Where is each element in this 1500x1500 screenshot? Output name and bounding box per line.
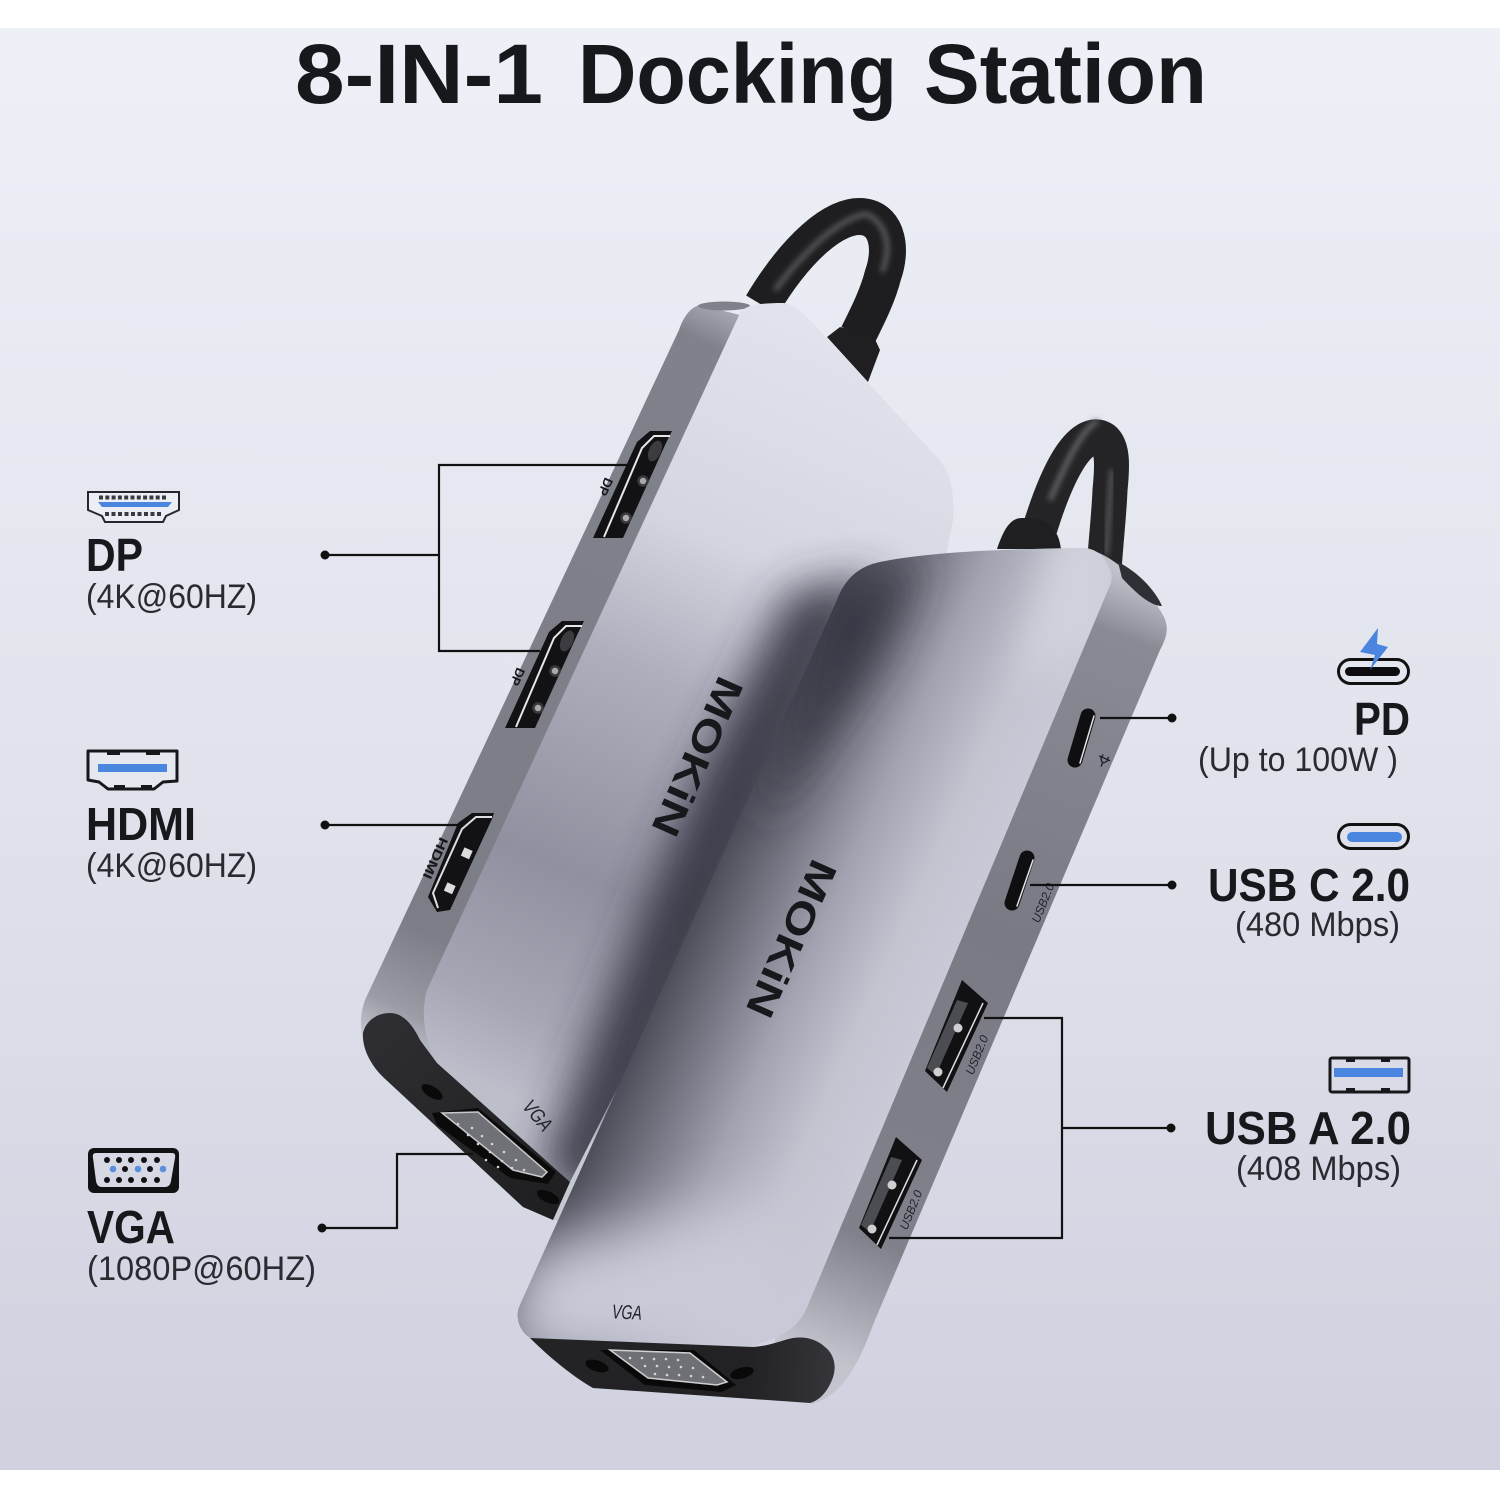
connector: USB C line bbox=[1030, 880, 1176, 890]
connector: VGA line bbox=[318, 1154, 473, 1232]
product: rear docking station bbox=[361, 214, 970, 1222]
connector: HDMI line bbox=[320, 820, 460, 830]
VGA silk label: front dock: VGA bbox=[611, 1301, 643, 1325]
icon: USB-C bbox=[1338, 824, 1408, 848]
USB-A silk label upper: USB2.0 bbox=[963, 1033, 991, 1077]
icon: USB-C power delivery bbox=[1338, 628, 1408, 684]
DP port lower bbox=[505, 621, 584, 728]
label: PD: PD bbox=[1354, 693, 1410, 745]
callout: HDMI bbox=[86, 751, 460, 885]
DP port upper: DP bbox=[595, 475, 616, 498]
icon: PD symbol on port bbox=[1095, 753, 1111, 769]
top surface: front dock bbox=[500, 530, 1130, 1360]
icon: VGA connector bbox=[88, 1148, 179, 1193]
HDMI port: HDMI bbox=[420, 835, 451, 881]
label: USB A 2.0: USB A 2.0 bbox=[1205, 1102, 1411, 1154]
icon: DP connector bbox=[88, 492, 179, 522]
USB-C PD port bbox=[1075, 716, 1094, 763]
spec: HDMI: (4K@60HZ) bbox=[86, 847, 257, 885]
HDMI port bbox=[420, 813, 494, 912]
brand logo: front dock: MOKiN bbox=[737, 853, 844, 1024]
power indicator lens: front dock bbox=[1118, 562, 1162, 606]
VGA silk label: rear dock: VGA bbox=[518, 1096, 556, 1136]
USB-A port upper bbox=[925, 980, 988, 1092]
label: VGA: VGA bbox=[87, 1201, 175, 1253]
callout: PD bbox=[1100, 628, 1410, 779]
side edge: rear dock bbox=[361, 305, 760, 1222]
top surface: rear dock bbox=[424, 303, 954, 1182]
USB-A port lower bbox=[859, 1137, 922, 1249]
cable: rear dock bbox=[762, 214, 887, 382]
icon: HDMI connector bbox=[88, 751, 177, 789]
USB-A silk label lower: USB2.0 bbox=[897, 1188, 925, 1232]
VGA end face: front dock bbox=[530, 1337, 835, 1403]
power indicator lens: rear dock bbox=[698, 302, 750, 310]
title: Docking bbox=[578, 27, 897, 121]
brand logo: rear dock: MOKiN bbox=[642, 670, 751, 843]
cable: front dock bbox=[997, 421, 1112, 570]
title: 8-IN-1 bbox=[295, 27, 543, 121]
spec: DP: (4K@60HZ) bbox=[86, 578, 257, 616]
label: HDMI: HDMI bbox=[86, 798, 196, 850]
spec: PD: (Up to 100W ) bbox=[1198, 741, 1398, 779]
icon: USB-A bbox=[1330, 1058, 1409, 1092]
title: Station bbox=[924, 27, 1207, 121]
connector: DP bracket bbox=[320, 465, 627, 651]
label: DP: DP bbox=[86, 529, 143, 581]
spec: VGA: (1080P@60HZ) bbox=[87, 1250, 316, 1288]
connector: PD line bbox=[1100, 714, 1176, 722]
USB-C port bbox=[1012, 858, 1033, 906]
DP port lower: DP bbox=[507, 665, 528, 688]
label: USB C 2.0: USB C 2.0 bbox=[1208, 859, 1410, 911]
callout: USB A bbox=[889, 1018, 1411, 1238]
product: front docking station bbox=[500, 421, 1167, 1404]
callout: VGA bbox=[87, 1148, 473, 1288]
spec: USB A: (408 Mbps) bbox=[1236, 1150, 1401, 1188]
callout: DP bbox=[86, 465, 627, 651]
connector: USB A bracket bbox=[889, 1018, 1176, 1238]
callout: USB C bbox=[1030, 824, 1410, 944]
USB-C silk label: USB2.0 bbox=[1029, 881, 1057, 925]
DP port upper bbox=[593, 431, 672, 538]
VGA end face: rear dock bbox=[363, 1013, 570, 1220]
side edge: front dock bbox=[770, 548, 1167, 1404]
spec: USB C: (480 Mbps) bbox=[1235, 906, 1400, 944]
